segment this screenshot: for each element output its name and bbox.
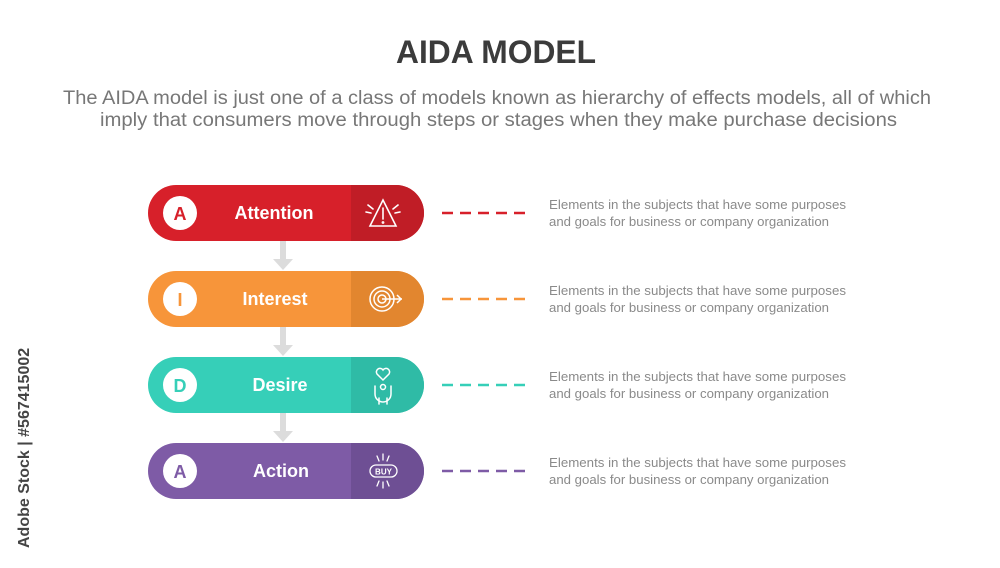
stage: Desire: Desire: [252, 375, 308, 395]
stage: Action: A: [174, 462, 186, 482]
stage: Action: BUY: [375, 468, 393, 476]
stage: Action: Action: [253, 461, 309, 481]
icon: buy: [370, 454, 397, 488]
descriptions: and goals for business or company organization: [549, 300, 829, 315]
watermark id: Adobe Stock | #567415002: [16, 348, 33, 548]
descriptions: Elements in the subjects that have some purposes: [549, 455, 847, 470]
subtitle: [63, 88, 931, 131]
descriptions: Elements in the subjects that have some purposes: [549, 197, 847, 212]
stage: Interest: Interest: [242, 289, 308, 309]
icon: warning: [366, 200, 400, 226]
subtitle: The AIDA model is just one of a class of models known as hierarchy of effects models, all of which: [63, 88, 931, 109]
stage: Attention: A: [174, 204, 186, 224]
stage: Desire: [148, 357, 431, 413]
stage: Interest: [148, 271, 431, 327]
descriptions: Elements in the subjects that have some purposes: [549, 369, 847, 384]
stage: Attention: [148, 185, 431, 241]
descriptions: and goals for business or company organization: [549, 472, 829, 487]
stage: Attention: Attention: [235, 203, 313, 223]
icon: heart hands: [375, 368, 391, 404]
stage: Action: [148, 443, 431, 499]
arrows between stages: [273, 241, 293, 442]
stage: Interest: I: [177, 290, 183, 310]
icon: target: [370, 287, 402, 311]
descriptions: and goals for business or company organization: [549, 214, 829, 229]
title: AIDA MODEL: [396, 34, 596, 70]
subtitle: imply that consumers move through steps or stages when they make purchase decisions: [100, 110, 897, 131]
descriptions: [549, 197, 847, 487]
descriptions: and goals for business or company organization: [549, 386, 829, 401]
dashed connectors: [442, 213, 531, 471]
descriptions: Elements in the subjects that have some purposes: [549, 283, 847, 298]
stage: Desire: D: [174, 376, 186, 396]
